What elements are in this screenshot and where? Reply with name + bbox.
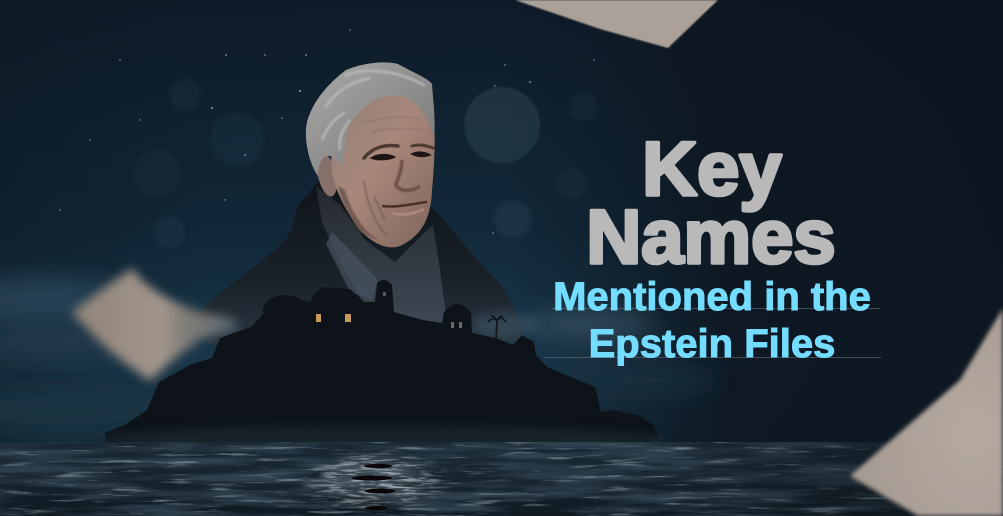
floating blurred orbs bbox=[133, 79, 598, 248]
palm tree bbox=[488, 316, 506, 340]
thin horizontal lines bbox=[545, 308, 881, 358]
paper: top bbox=[515, 0, 718, 48]
hair highlights bbox=[322, 71, 425, 150]
hair bbox=[306, 62, 435, 176]
shirt collar bbox=[326, 232, 378, 300]
cloud bank over coat bbox=[186, 313, 540, 337]
cheek shading bbox=[338, 186, 385, 244]
face bbox=[331, 95, 435, 247]
scarf and shirt bbox=[316, 186, 448, 330]
lower island haze bbox=[90, 426, 670, 454]
mouth bbox=[382, 202, 427, 207]
island with house silhouette bbox=[90, 280, 670, 454]
tree mass bbox=[263, 295, 307, 325]
title: key names: Names bbox=[586, 195, 836, 280]
brows and eyes bbox=[364, 145, 433, 159]
distant clouds bbox=[0, 278, 720, 432]
paper: left blurred bbox=[72, 268, 236, 381]
nose shadow bbox=[396, 160, 420, 190]
subtitle: Mentioned in the bbox=[553, 275, 871, 319]
portrait of man bbox=[196, 62, 524, 350]
subtitle bbox=[553, 275, 871, 366]
face creases bbox=[364, 180, 387, 236]
stormy sea bbox=[0, 442, 1003, 516]
ear bbox=[314, 152, 340, 198]
stars bbox=[59, 29, 595, 234]
title: key names bbox=[586, 127, 836, 280]
lit windows bbox=[316, 292, 462, 328]
lower lip bbox=[392, 209, 424, 214]
paper: right bottom bbox=[850, 308, 1003, 516]
subtitle: Epstein Files bbox=[589, 322, 835, 366]
coat bbox=[196, 180, 524, 350]
title: key names: Key bbox=[642, 127, 782, 212]
moon reflection on water bbox=[300, 448, 451, 515]
forehead wrinkles bbox=[366, 117, 424, 132]
